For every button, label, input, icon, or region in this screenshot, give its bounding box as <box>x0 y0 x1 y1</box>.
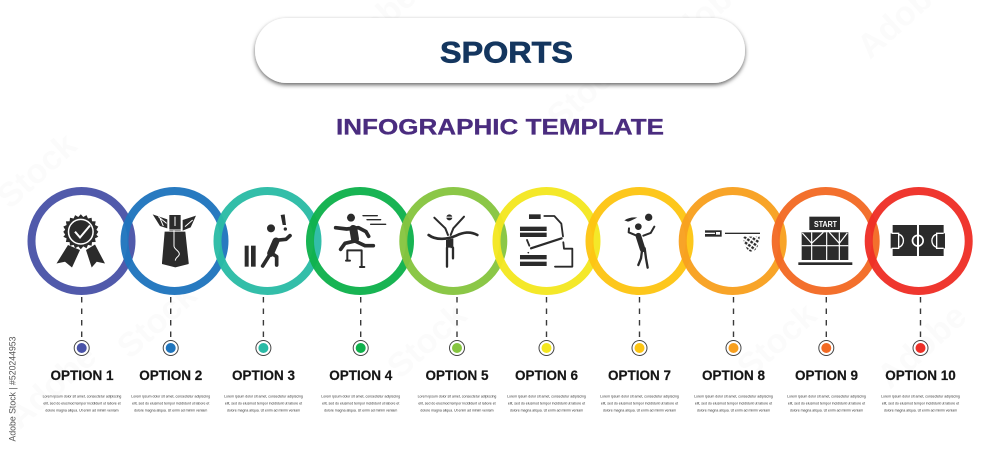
description: elit, sed do eiusmod tempor incididunt ut labore et <box>418 401 496 405</box>
label: OPTION 6 <box>515 368 578 383</box>
description <box>600 394 679 412</box>
label: OPTION 4 <box>329 368 393 383</box>
description: elit, sed do eiusmod tempor incididunt ut labore et <box>882 401 959 405</box>
marker dot <box>539 340 554 356</box>
icon: cricket player <box>245 214 290 267</box>
marker dot <box>74 340 89 356</box>
watermark: Adobe <box>0 337 104 436</box>
description: elit, sed do eiusmod tempor incididunt ut labore et <box>695 401 772 405</box>
marker dot <box>163 340 178 356</box>
option 7 <box>590 191 690 412</box>
subtitle: infographic template: INFOGRAPHIC TEMPLATE <box>336 114 664 139</box>
option 3 <box>218 191 318 412</box>
description: elit, sed do eiusmod tempor incididunt ut labore et <box>43 401 121 405</box>
description: Lorem ipsum dolor sit amet, consectetur adipiscing <box>787 394 866 398</box>
connector <box>546 297 548 338</box>
description <box>787 394 866 412</box>
description: dolore magna aliqua. Ut enim ad minim veniam <box>134 408 207 412</box>
description <box>418 394 496 412</box>
icon: landing net <box>705 230 760 252</box>
watermark: Adobe <box>870 297 974 396</box>
label: OPTION 2 <box>139 368 202 383</box>
icon: volleyball player <box>624 214 654 268</box>
description: Lorem ipsum dolor sit amet, consectetur adipiscing <box>131 394 210 398</box>
option 4 <box>310 191 410 412</box>
label: OPTION 7 <box>608 368 671 383</box>
description: Lorem ipsum dolor sit amet, consectetur adipiscing <box>418 394 496 398</box>
watermark: Stock <box>380 296 474 386</box>
description <box>43 394 121 412</box>
description <box>507 394 586 412</box>
description: dolore magna aliqua. Ut enim ad minim veniam <box>603 408 676 412</box>
description: Lorem ipsum dolor sit amet, consectetur adipiscing <box>224 394 303 398</box>
description <box>224 394 303 412</box>
icon: tower <box>153 214 196 267</box>
description: Lorem ipsum dolor sit amet, consectetur adipiscing <box>321 394 400 398</box>
marker dot <box>450 340 464 356</box>
label: OPTION 9 <box>795 368 858 383</box>
connector <box>81 297 83 338</box>
description: dolore magna aliqua. Ut enim ad minim veniam <box>790 408 863 412</box>
label: OPTION 8 <box>702 368 765 383</box>
connector <box>170 297 172 338</box>
title pill <box>255 18 745 83</box>
side credit: Adobe Stock | #520244953 <box>8 336 18 442</box>
description: Lorem ipsum dolor sit amet, consectetur adipiscing <box>507 394 586 398</box>
option 10 <box>869 191 969 412</box>
description: Lorem ipsum dolor sit amet, consectetur adipiscing <box>43 394 121 398</box>
label: OPTION 1 <box>50 368 114 383</box>
connector <box>920 297 922 338</box>
description <box>131 394 210 412</box>
marker dot <box>819 340 834 356</box>
watermark: Stock <box>730 296 824 386</box>
description: elit, sed do eiusmod tempor incididunt ut labore et <box>508 401 585 405</box>
connector <box>456 297 458 338</box>
marker dot <box>726 340 741 356</box>
connector <box>825 297 827 338</box>
description: elit, sed do eiusmod tempor incididunt ut labore et <box>788 401 865 405</box>
description <box>321 394 400 412</box>
sign text: START <box>814 219 838 229</box>
marker dot <box>913 340 928 356</box>
option 6 <box>496 191 596 412</box>
description <box>881 394 960 412</box>
description: elit, sed do eiusmod tempor incididunt ut labore et <box>225 401 302 405</box>
description: dolore magna aliqua. Ut enim ad minim veniam <box>227 408 300 412</box>
description: Lorem ipsum dolor sit amet, consectetur adipiscing <box>694 394 773 398</box>
label: OPTION 10 <box>885 368 956 383</box>
connector <box>732 297 734 338</box>
connector <box>262 297 264 338</box>
description: elit, sed do eiusmod tempor incididunt ut labore et <box>601 401 678 405</box>
description: dolore magna aliqua. Ut enim ad minim veniam <box>510 408 583 412</box>
watermark: Stock <box>540 46 634 136</box>
icon: gym equipment <box>520 214 572 267</box>
option 5 <box>403 191 503 412</box>
watermark: Stock <box>110 276 204 366</box>
marker dot <box>256 340 271 356</box>
description: elit, sed do eiusmod tempor incididunt ut labore et <box>132 401 209 405</box>
description: dolore magna aliqua. Ut enim ad minim veniam <box>45 408 119 412</box>
icon: football pitch <box>891 225 945 256</box>
description: dolore magna aliqua. Ut enim ad minim veniam <box>420 408 494 412</box>
option 9 <box>776 191 876 412</box>
label: OPTION 5 <box>425 368 489 383</box>
title: SPORTS: SPORTS <box>440 36 573 70</box>
icon: award ribbon <box>56 214 105 268</box>
label: OPTION 3 <box>232 368 295 383</box>
description: Lorem ipsum dolor sit amet, consectetur adipiscing <box>600 394 679 398</box>
marker dot <box>632 340 647 356</box>
description: dolore magna aliqua. Ut enim ad minim veniam <box>324 408 397 412</box>
icon: start gate <box>798 217 852 265</box>
description: Lorem ipsum dolor sit amet, consectetur adipiscing <box>881 394 960 398</box>
marker dot <box>353 340 368 356</box>
connector <box>360 297 362 338</box>
option 8 <box>683 191 783 412</box>
description <box>694 394 773 412</box>
option 2 <box>124 191 224 412</box>
connector <box>638 297 640 338</box>
icon: hurdle runner <box>336 214 386 267</box>
icon: finish line runner <box>429 214 477 267</box>
option 1 <box>32 191 132 412</box>
description: dolore magna aliqua. Ut enim ad minim veniam <box>697 408 770 412</box>
description: dolore magna aliqua. Ut enim ad minim veniam <box>884 408 957 412</box>
description: elit, sed do eiusmod tempor incididunt ut labore et <box>322 401 399 405</box>
